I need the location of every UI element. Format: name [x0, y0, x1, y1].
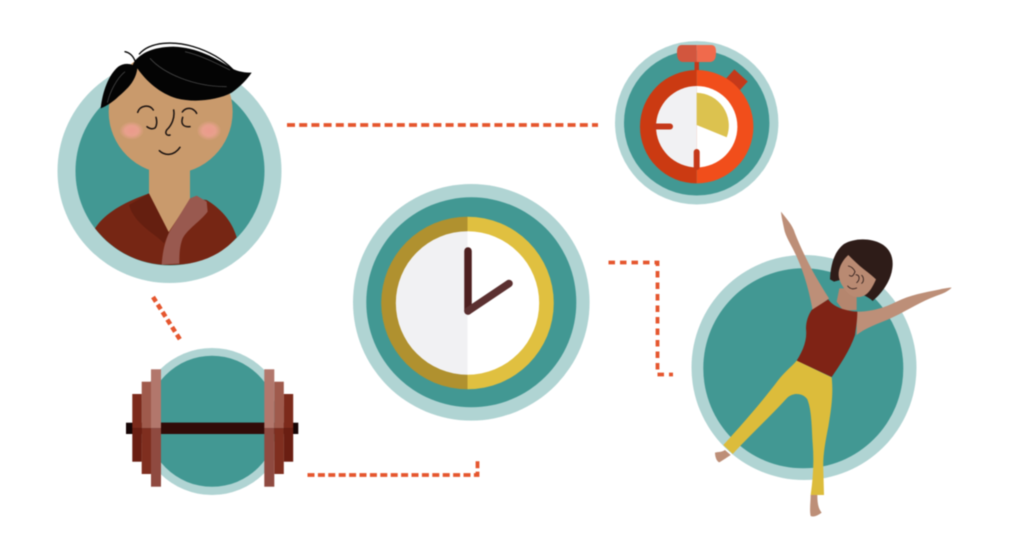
icon: man portrait — [58, 43, 282, 283]
feet — [715, 450, 822, 517]
connector: man to dumbbell — [153, 297, 181, 341]
top — [797, 299, 857, 377]
right arm — [857, 288, 952, 335]
dumbbell circle inner — [146, 356, 278, 487]
stopwatch face — [656, 86, 737, 167]
man circle inner — [76, 76, 264, 266]
man figure — [95, 43, 252, 265]
face lines — [848, 266, 863, 289]
clock face — [396, 231, 539, 375]
neck — [149, 165, 190, 232]
connector: dumbbell to clock — [308, 459, 478, 475]
clock ring — [381, 217, 554, 389]
neck — [837, 288, 857, 311]
connector: man to stopwatch — [287, 123, 598, 127]
icon: stretching woman — [692, 212, 952, 517]
bar — [126, 423, 298, 434]
woman circle outer — [692, 255, 916, 480]
stopwatch circle inner — [624, 50, 769, 196]
connector: clock to woman — [608, 262, 673, 374]
hair strands — [125, 43, 233, 69]
face lines — [138, 106, 197, 154]
ticks — [656, 126, 697, 167]
robe light lapel — [162, 196, 208, 265]
cheeks — [120, 121, 221, 140]
dumbbell circle outer — [138, 348, 286, 495]
left plates — [132, 369, 161, 487]
robe dark lapel — [129, 193, 169, 243]
man circle outer — [58, 59, 282, 283]
icon: stopwatch — [615, 41, 778, 204]
robe — [95, 193, 237, 265]
clock circle outer — [353, 184, 590, 421]
stopwatch circle outer — [615, 41, 778, 204]
yellow elapsed wedge — [697, 93, 729, 137]
side button — [724, 69, 748, 93]
hair back — [830, 239, 893, 301]
woman circle inner — [703, 268, 903, 468]
icon: dumbbell — [126, 348, 298, 495]
left arm — [781, 212, 829, 311]
hair highlights — [107, 52, 230, 103]
head — [109, 50, 233, 174]
clock hands — [468, 251, 509, 311]
icon: wall clock — [353, 184, 590, 421]
hair — [101, 47, 252, 108]
stem — [694, 60, 699, 72]
woman figure — [715, 212, 952, 517]
clock circle inner — [366, 197, 576, 407]
knob — [677, 45, 716, 62]
stopwatch body — [640, 70, 753, 183]
leggings — [723, 361, 832, 495]
face — [839, 255, 876, 297]
right plates — [264, 369, 293, 487]
